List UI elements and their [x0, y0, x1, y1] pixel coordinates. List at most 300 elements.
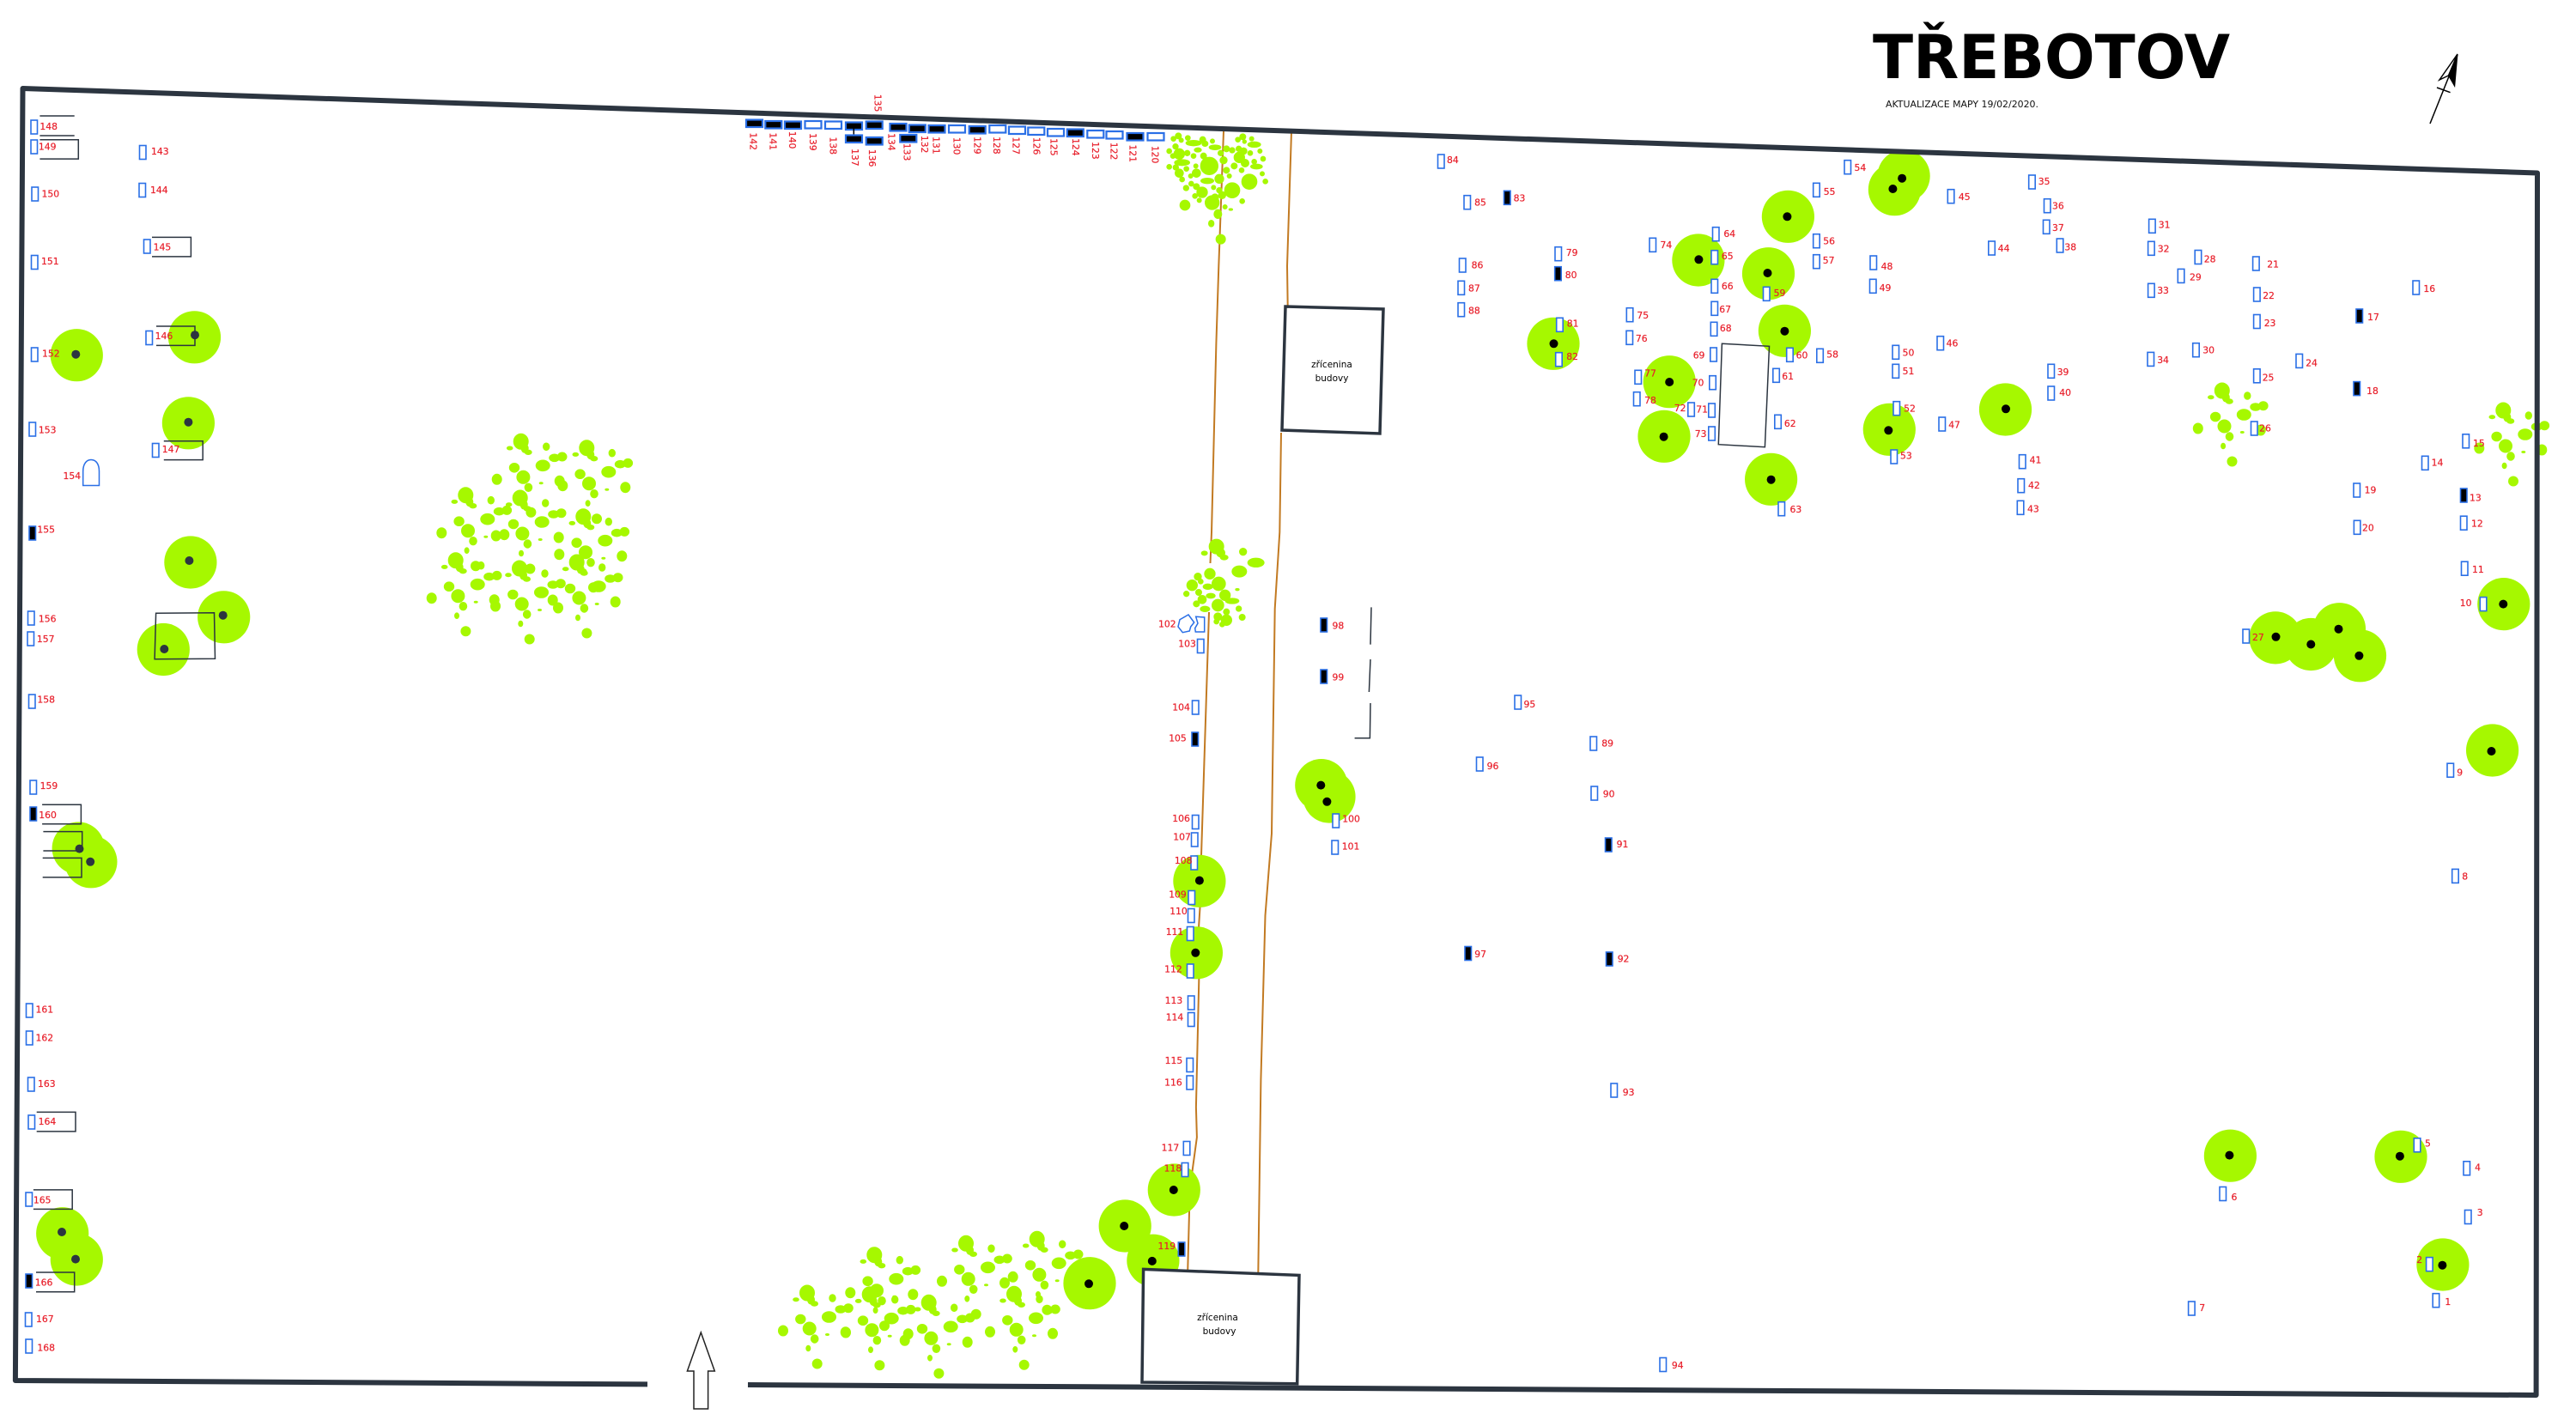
grave 127: 127 [1010, 137, 1021, 155]
building ruin: lower: zřícenina [1197, 1313, 1238, 1323]
grave 118: 118 [1164, 1162, 1182, 1174]
grave 51 [1893, 364, 1914, 378]
grave 5 [2414, 1138, 2431, 1152]
tree pair [36, 1207, 103, 1286]
grave 121: 121 [1127, 144, 1139, 162]
grave 46 [1937, 337, 1958, 350]
grave 3 [2464, 1207, 2483, 1224]
grave 54 [1844, 161, 1866, 174]
grave 68 [1710, 322, 1732, 336]
grave 43 [2017, 501, 2039, 515]
grave 9: 9 [2457, 768, 2463, 778]
grave 79 [1555, 247, 1578, 261]
grave 10: 10 [2460, 598, 2472, 609]
tree [1745, 453, 1797, 506]
grave 50: 50 [1903, 347, 1914, 359]
grave 85 [1464, 196, 1486, 209]
grave 143: 143 [151, 146, 169, 157]
grave 47 [1939, 417, 1960, 431]
tree [1643, 355, 1696, 408]
grave 61 [1773, 368, 1794, 382]
grave 167 [26, 1313, 54, 1326]
grave 24 [2296, 354, 2318, 369]
grave 26 [2251, 422, 2271, 435]
grave 27: 27 [2252, 632, 2264, 643]
grave 92 [1606, 952, 1629, 966]
grave 32 [2148, 241, 2170, 255]
grave 17: 17 [2367, 312, 2379, 323]
grave 162: 162 [36, 1032, 53, 1043]
grave 138: 138 [827, 137, 838, 155]
grave 129 [969, 126, 986, 155]
grave 126 [1028, 127, 1044, 155]
grave 113: 113 [1165, 995, 1182, 1006]
grave 97: 97 [1474, 949, 1486, 960]
grave 58 [1817, 349, 1838, 362]
grave 149: 149 [39, 141, 57, 152]
grave 152: 152 [42, 349, 60, 359]
grave 141 [765, 121, 781, 150]
grave 166: 166 [35, 1277, 53, 1288]
icon: north arrow [2430, 54, 2458, 124]
grave 20 [2354, 520, 2374, 534]
grave 41: 41 [2030, 455, 2041, 465]
grave 8 [2452, 869, 2468, 883]
grave 135 [866, 94, 883, 129]
grave 114: 114 [1166, 1011, 1183, 1023]
grave 117: 117 [1162, 1142, 1179, 1153]
grave 135: 135 [872, 94, 883, 112]
grave 165 [26, 1192, 52, 1206]
grave 145: 145 [154, 242, 171, 253]
grave 74 [1649, 238, 1672, 252]
grave 38 [2057, 239, 2076, 252]
grave 51: 51 [1903, 366, 1914, 377]
grave 18 [2354, 382, 2379, 397]
grave 50 [1893, 345, 1914, 359]
grave 146 [146, 331, 173, 345]
grave 77 [1635, 367, 1656, 384]
grave 90: 90 [1603, 788, 1615, 799]
grave 37: 37 [2052, 222, 2064, 234]
grave 67 [1711, 301, 1731, 315]
grave 8: 8 [2462, 871, 2468, 883]
grave 108 [1175, 855, 1197, 870]
tree [1742, 247, 1795, 300]
grave 160 [30, 807, 57, 821]
grave 22: 22 [2263, 290, 2275, 301]
tree [162, 397, 215, 449]
grave 122: 122 [1108, 143, 1119, 160]
tree pair [1868, 149, 1930, 215]
grave 83 [1504, 191, 1525, 204]
grave 157: 157 [37, 634, 55, 645]
grave 93: 93 [1623, 1087, 1635, 1098]
grave 132: 132 [919, 136, 930, 153]
grave 55: 55 [1824, 186, 1836, 197]
grave 72: 72 [1674, 403, 1686, 414]
tree [2416, 1238, 2469, 1291]
grave 70: 70 [1692, 378, 1704, 388]
grave 20: 20 [2362, 522, 2374, 533]
grave 16: 16 [2423, 283, 2435, 294]
tree [2285, 618, 2337, 671]
tree [1063, 1257, 1116, 1309]
grave 150: 150 [41, 188, 59, 199]
grave 96 [1477, 757, 1498, 772]
grave 34: 34 [2157, 355, 2169, 366]
tree [2249, 611, 2302, 665]
grave 109: 109 [1169, 889, 1187, 901]
grave 57: 57 [1823, 255, 1835, 266]
grave 64: 64 [1723, 228, 1735, 240]
grave 130: 130 [951, 137, 963, 155]
grave 75: 75 [1637, 310, 1649, 321]
grave 103: 103 [1178, 639, 1196, 649]
grave 82 [1556, 351, 1578, 367]
grave 65 [1711, 251, 1734, 264]
grave 71 [1696, 404, 1715, 417]
grave 110 [1170, 906, 1194, 922]
grave 84 [1437, 155, 1459, 168]
grave 156: 156 [39, 613, 57, 624]
grave 89 [1590, 737, 1613, 750]
grave 44: 44 [1998, 243, 2010, 254]
tree [1099, 1199, 1151, 1253]
grave 65: 65 [1722, 251, 1734, 262]
grave 3: 3 [2477, 1207, 2483, 1218]
grave 54: 54 [1855, 162, 1866, 173]
grave 159: 159 [40, 780, 58, 792]
grave 40 [2048, 386, 2071, 400]
grave 122 [1106, 131, 1123, 160]
grave 15 [2463, 434, 2485, 449]
grave 143 [139, 146, 169, 160]
grave 163 [27, 1077, 56, 1091]
grave 162 [26, 1031, 53, 1045]
grave 91: 91 [1617, 839, 1628, 850]
grave 168: 168 [37, 1343, 55, 1353]
tree [2374, 1131, 2427, 1183]
grave 130 [949, 125, 965, 155]
grave 111: 111 [1166, 926, 1183, 938]
foliage: left cluster [427, 434, 633, 644]
tree [1527, 318, 1580, 370]
grave 121 [1127, 133, 1144, 162]
grave 39 [2048, 364, 2069, 378]
grave 38: 38 [2064, 242, 2076, 252]
grave 47: 47 [1948, 419, 1960, 431]
map update date: AKTUALIZACE MAPY 19/02/2020. [1886, 100, 2038, 110]
grave 128 [989, 125, 1005, 155]
grave 164 [28, 1115, 56, 1129]
grave 114 [1166, 1011, 1194, 1027]
building ruin: upper: budovy [1315, 373, 1348, 384]
grave 161 [26, 1004, 53, 1017]
grave 87 [1458, 281, 1480, 294]
grave 31 [2149, 219, 2171, 233]
grave 120: 120 [1149, 146, 1160, 163]
grave 104: 104 [1172, 702, 1190, 713]
tree [1148, 1163, 1200, 1217]
grave 108: 108 [1175, 855, 1193, 866]
icon: entrance arrow [687, 1332, 714, 1409]
grave 72 [1674, 403, 1694, 416]
tree pair [52, 822, 117, 888]
grave 163: 163 [38, 1078, 56, 1089]
grave 30: 30 [2202, 345, 2215, 356]
grave 61: 61 [1782, 371, 1794, 382]
grave 35 [2029, 175, 2050, 189]
grave 13: 13 [2470, 493, 2482, 503]
grave 156 [27, 611, 57, 625]
grave 131 [929, 125, 945, 155]
foliage: bottom cluster [778, 1231, 1083, 1378]
grave 142 [746, 120, 762, 150]
outlines: small structures [33, 116, 1769, 1292]
grave 147 [153, 443, 179, 457]
grave 62: 62 [1784, 418, 1796, 429]
grave 134 [886, 124, 907, 151]
grave 29 [2178, 269, 2202, 283]
grave 116 [1164, 1076, 1194, 1089]
grave 164: 164 [39, 1116, 56, 1127]
grave 140 [785, 122, 801, 149]
tree [1759, 305, 1811, 357]
grave 33: 33 [2157, 285, 2169, 296]
graves: central column [1157, 615, 1684, 1372]
grave 147: 147 [162, 444, 179, 455]
grave 43: 43 [2027, 503, 2039, 515]
grave 102: 102 [1158, 618, 1176, 630]
grave 71: 71 [1696, 404, 1708, 416]
grave 133: 133 [902, 143, 913, 161]
tree [2334, 629, 2386, 682]
grave 159 [30, 780, 58, 794]
graves: right block [2148, 219, 2487, 1315]
grave 99: 99 [1333, 671, 1344, 683]
trees: green crowns with trunks [36, 149, 2530, 1309]
grave 59: 59 [1774, 288, 1785, 299]
grave 148: 148 [39, 121, 58, 132]
foliage: middle tree group [1184, 539, 1264, 627]
grave 27 [2243, 629, 2264, 643]
grave 134: 134 [886, 133, 896, 151]
grave 60: 60 [1796, 350, 1807, 361]
grave 155: 155 [37, 524, 55, 536]
grave 21: 21 [2267, 259, 2279, 270]
grave 144 [139, 184, 168, 197]
building ruin: lower: budovy [1203, 1326, 1236, 1337]
grave 6: 6 [2231, 1192, 2238, 1203]
grave 99 [1321, 670, 1344, 683]
grave 125: 125 [1048, 138, 1060, 156]
grave 13 [2461, 489, 2482, 503]
grave 23: 23 [2264, 318, 2275, 329]
title: TŘEBOTOV [1873, 22, 2230, 93]
grave 2 [2416, 1254, 2433, 1271]
grave 94 [1660, 1358, 1684, 1372]
grave 117 [1162, 1142, 1190, 1156]
path: right brown line [1258, 131, 1291, 1273]
grave 22 [2254, 288, 2275, 301]
grave 73: 73 [1695, 428, 1707, 440]
tree [1173, 855, 1226, 907]
tree [2466, 724, 2518, 777]
grave 77: 77 [1644, 367, 1656, 379]
grave 56: 56 [1823, 235, 1835, 247]
tree [137, 623, 190, 676]
grave 148 [31, 120, 58, 134]
grave 150 [32, 187, 59, 201]
grave 152 [31, 348, 60, 361]
grave 136: 136 [866, 149, 878, 167]
grave 81 [1557, 318, 1579, 331]
grave 23 [2254, 314, 2275, 329]
grave 10 [2460, 598, 2487, 611]
grave 96: 96 [1487, 761, 1498, 772]
grave 160: 160 [39, 810, 57, 821]
grave 123: 123 [1090, 142, 1101, 160]
grave 28 [2195, 251, 2216, 264]
grave 84: 84 [1447, 155, 1459, 166]
grave 105: 105 [1169, 732, 1187, 743]
grave 132 [909, 125, 930, 153]
grave 97 [1465, 946, 1486, 960]
grave 36: 36 [2052, 201, 2064, 211]
grave 167: 167 [36, 1314, 54, 1325]
grave 158: 158 [37, 695, 55, 706]
grave 25 [2254, 369, 2274, 383]
grave 86 [1460, 258, 1483, 272]
grave 101: 101 [1342, 841, 1359, 852]
grave 64 [1712, 228, 1735, 241]
grave 80: 80 [1565, 270, 1577, 281]
building ruin: upper: zřícenina [1311, 360, 1352, 370]
grave 58: 58 [1826, 349, 1838, 361]
grave 78: 78 [1644, 395, 1656, 406]
grave 2: 2 [2416, 1254, 2422, 1265]
graves: left wall [26, 120, 179, 1353]
grave 56 [1814, 234, 1835, 248]
grave 166 [26, 1274, 53, 1288]
grave 100 [1333, 814, 1360, 828]
tree [164, 536, 216, 589]
grave 151 [31, 256, 59, 270]
grave 123 [1087, 130, 1103, 160]
grave 146: 146 [155, 331, 173, 342]
grave 4: 4 [2475, 1162, 2481, 1174]
grave 21 [2253, 257, 2279, 270]
grave 91 [1606, 838, 1628, 852]
tree [51, 329, 103, 381]
grave 80 [1555, 267, 1577, 281]
grave 100: 100 [1342, 814, 1360, 825]
grave 36 [2044, 199, 2064, 213]
graves: upper middle block [1437, 155, 2076, 516]
grave 105 [1169, 732, 1199, 746]
grave 139 [805, 121, 821, 151]
grave 25: 25 [2263, 372, 2274, 383]
grave 111 [1166, 926, 1194, 941]
grave 103 [1178, 639, 1204, 652]
grave 9 [2447, 763, 2463, 778]
tree [1127, 1235, 1180, 1287]
grave 165: 165 [33, 1195, 52, 1205]
grave 12: 12 [2471, 519, 2483, 530]
grave 67: 67 [1719, 304, 1731, 315]
grave 31: 31 [2159, 220, 2171, 231]
grave 40: 40 [2059, 387, 2071, 398]
grave 45: 45 [1959, 191, 1971, 203]
building ruin: upper [1282, 306, 1383, 434]
grave 153 [29, 422, 57, 436]
grave 129: 129 [971, 137, 982, 155]
grave 63 [1778, 502, 1801, 516]
grave 110: 110 [1170, 906, 1188, 917]
grave 4 [2464, 1162, 2481, 1175]
grave 95: 95 [1523, 699, 1535, 710]
grave 16 [2413, 281, 2435, 294]
grave 19: 19 [2365, 484, 2376, 495]
grave 19 [2354, 483, 2376, 497]
grave 107 [1173, 831, 1198, 847]
grave 133 [900, 135, 916, 161]
grave 12 [2461, 516, 2483, 530]
grave 93 [1611, 1083, 1635, 1098]
grave 144: 144 [150, 185, 168, 196]
grave 94: 94 [1672, 1360, 1684, 1371]
grave 168 [26, 1339, 55, 1353]
grave 139: 139 [807, 133, 818, 151]
grave 115: 115 [1165, 1055, 1182, 1066]
grave 26: 26 [2259, 422, 2271, 434]
tree [1863, 404, 1916, 456]
tree [168, 311, 221, 363]
tree [1672, 234, 1724, 287]
grave 140: 140 [787, 131, 798, 149]
grave 119: 119 [1157, 1241, 1176, 1252]
grave 151: 151 [41, 256, 59, 267]
grave 35: 35 [2038, 176, 2050, 187]
grave 106: 106 [1172, 813, 1190, 824]
grave 49 [1870, 279, 1891, 294]
grave 90 [1591, 786, 1615, 800]
grave 28: 28 [2204, 254, 2216, 264]
grave 33 [2148, 283, 2169, 297]
grave 15: 15 [2473, 438, 2485, 449]
grave 112: 112 [1164, 963, 1182, 974]
grave 87: 87 [1468, 283, 1480, 294]
grave 101 [1332, 841, 1359, 854]
tree [2477, 578, 2530, 630]
tree [1170, 926, 1223, 979]
grave 136 [866, 137, 883, 167]
grave 137 [846, 122, 862, 167]
grave 154: 154 [64, 470, 81, 482]
grave 153: 153 [39, 424, 57, 436]
grave 46: 46 [1947, 338, 1958, 349]
grave 79: 79 [1566, 247, 1578, 258]
grave 52: 52 [1904, 404, 1916, 414]
grave 127 [1009, 127, 1025, 155]
grave 24: 24 [2306, 357, 2318, 369]
tree [1979, 383, 2032, 436]
building ruin: lower [1142, 1269, 1299, 1384]
grave 142: 142 [747, 132, 758, 150]
grave 5: 5 [2425, 1138, 2431, 1150]
grave 98: 98 [1333, 620, 1344, 632]
